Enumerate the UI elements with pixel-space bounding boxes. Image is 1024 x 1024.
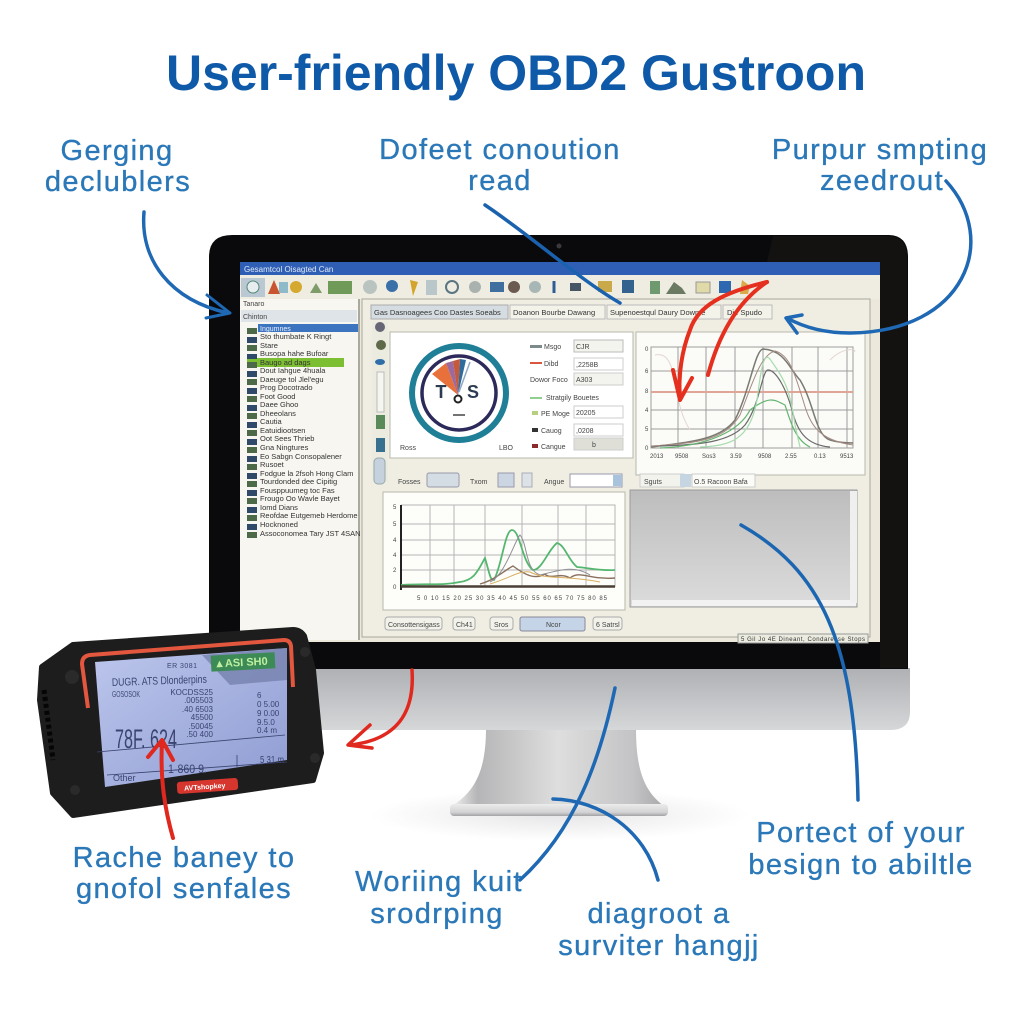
label: top right: Purpur smpting: [772, 134, 988, 166]
control row: [398, 473, 755, 487]
gauge legend: b: [592, 442, 596, 449]
sidebar tree: Reofdae Eutgemeb Herdome: [260, 511, 358, 520]
sidebar tree: Iomd Dians: [260, 503, 298, 512]
line chart top right: 3.59: [730, 454, 742, 460]
sidebar tree: Stare: [260, 341, 278, 350]
device readout: KOCDSS25: [170, 688, 214, 697]
sidebar tree: Tanaro: [243, 301, 265, 308]
red badge: AVTshopkey: [184, 783, 226, 793]
line chart top right: 0: [645, 446, 649, 452]
gauge panel: Ross: [400, 445, 416, 452]
line chart top right: 5: [645, 427, 649, 433]
line chart top right: 2.55: [785, 454, 797, 460]
line chart bottom left: 5 0 10 15 20 25 30 35 40 45 50 55 60 65 70 75 80 85: [417, 596, 608, 602]
monitor stand: [452, 728, 664, 816]
red badge: [177, 778, 238, 794]
label: top left: [45, 135, 191, 198]
line chart bottom left: 5: [393, 505, 397, 511]
control row: Fosses: [398, 479, 421, 486]
gauge legend: Dibd: [544, 361, 559, 368]
label: diagnose: diagroot a: [588, 898, 730, 930]
line chart bottom left: 2: [393, 568, 397, 574]
line chart bottom left: 0: [393, 585, 397, 591]
device readout: GOSOSOK: [112, 690, 140, 699]
sidebar tree: Gna Ningtures: [260, 443, 309, 452]
gauge legend: [530, 340, 623, 451]
sidebar tree: Ingumnes: [260, 326, 291, 333]
device readout: 0.4 m: [257, 726, 277, 735]
gauge legend: Cauog: [541, 428, 562, 435]
device readout: 0 5.00: [257, 700, 280, 709]
sidebar tree: Tourdonded dee Cipitig: [260, 477, 337, 486]
line chart top right: [636, 332, 865, 475]
gauge legend: Dowor Foco: [530, 377, 568, 384]
line chart bottom left: 4: [393, 538, 397, 544]
sidebar tree: Cautia: [260, 417, 283, 426]
arrow: red under monitor: [348, 670, 412, 748]
device readout: 9.5.0: [257, 718, 275, 727]
sidebar tree: Chinton: [243, 314, 267, 321]
sidebar tree: Frougo Oo Wavle Bayet: [260, 494, 341, 503]
control row: O.5 Racoon Bafa: [694, 479, 748, 486]
sidebar tree: Fodgue la 2fsoh Hong Clam: [260, 469, 353, 478]
control row: Angue: [544, 479, 564, 486]
device readout: 45500: [191, 713, 214, 722]
label: lower right: Portect of your: [756, 817, 966, 849]
line chart top right: 8: [645, 389, 649, 395]
annotation arrows: [144, 181, 971, 880]
device readout: .50045: [189, 722, 214, 731]
sidebar tree: Daee Ghoo: [260, 400, 298, 409]
software window: [240, 262, 880, 643]
label: top centre: read: [468, 165, 532, 197]
status bar: 5 Gil Jo 4E Dineant, Condaresse Stops: [741, 637, 865, 643]
line chart bottom left: 4: [393, 553, 397, 559]
label: top right: zeedrout: [820, 165, 944, 197]
sidebar tree: Oot Sees Thrieb: [260, 434, 314, 443]
toolbar: [240, 275, 880, 299]
gauge panel: T: [436, 382, 446, 402]
sidebar tree: Hocknoned: [260, 520, 298, 529]
tabs: Doanon Bourbe Dawang: [513, 308, 595, 317]
sidebar tree: Baugo ad dags: [260, 358, 311, 367]
gauge panel: [390, 332, 633, 458]
buttons row: Consottensigass: [388, 622, 440, 629]
tabs: Gas Dasnoagees Coo Dastes Soeabs: [374, 308, 501, 317]
arrow: red to chart: [673, 282, 767, 400]
control row: Txom: [470, 479, 488, 486]
monitor chin: [210, 668, 910, 730]
device readout: DUGR. ATS Dlonderpins: [112, 674, 207, 689]
sidebar tree: Assoconomea Tary JST 4SAN: [260, 529, 361, 538]
label: top centre: [379, 134, 621, 197]
gauge legend: 20205: [576, 410, 596, 417]
gauge legend: CJR: [576, 344, 590, 351]
sidebar tree: Eo Sabgn Consopalener: [260, 452, 342, 461]
arrow: stand to working label: [520, 688, 615, 880]
red trim: [82, 640, 293, 708]
device readout: .50 400: [186, 730, 214, 739]
label: top left: declublers: [45, 166, 191, 198]
gauge legend: Msgo: [544, 344, 561, 351]
device readout: 78F. 624: [115, 724, 177, 754]
label: top left: Gerging: [61, 135, 173, 167]
sidebar tree: Eatuidiootsen: [260, 426, 305, 435]
tabs: Supenoestqul Daury Dowme: [610, 308, 705, 317]
sidebar tree: Rusoet: [260, 460, 285, 469]
tabs: [371, 305, 772, 319]
line chart top right: 6: [645, 369, 649, 375]
line chart top right: 9513: [840, 454, 854, 460]
label: working: Woriing kuit: [355, 866, 523, 898]
buttons row: Sros: [494, 622, 509, 629]
gauge legend: Stratgily Bouetes: [546, 395, 599, 402]
sidebar tree: Dout Iahgue 4huala: [260, 366, 326, 375]
device readout: ER 3081: [167, 663, 197, 670]
device readout: 5 31 m: [260, 755, 284, 766]
tabs: Die Spudo: [727, 308, 762, 317]
sidebar tree: Daeuge tol Jlel'egu: [260, 375, 324, 384]
gauge legend: ,2258B: [576, 362, 599, 369]
gauge legend: PE Moge: [541, 411, 570, 418]
gauge legend: Cangue: [541, 444, 566, 451]
line chart top right: 2013: [650, 454, 664, 460]
buttons row: [385, 617, 622, 631]
device readout: 6: [257, 691, 262, 700]
sidebar tree: Fousppuumeg toc Fas: [260, 486, 335, 495]
stand shadow: [370, 789, 750, 841]
title bar: [240, 262, 880, 275]
handheld scanner: [40, 630, 321, 815]
arrow: centre label to tabs: [485, 205, 620, 303]
line chart top right: 9508: [675, 454, 689, 460]
line chart bottom left: 5: [393, 522, 397, 528]
label: diagnose: surviter hangjj: [558, 930, 760, 962]
label: top right: [772, 134, 988, 197]
label: working: srodrping: [370, 898, 504, 930]
arrow: base to diagnose label: [553, 799, 658, 880]
line chart top right: 4: [645, 408, 649, 414]
device readout: Other: [113, 773, 136, 783]
vertical tool strip: [372, 322, 388, 484]
status bar: [738, 634, 868, 643]
sidebar tree: [240, 299, 361, 640]
label: lower right: besign to abiltle: [748, 849, 974, 881]
control row: Sguts: [644, 479, 662, 486]
device readout: .40 6503: [182, 705, 214, 714]
status badge: [211, 652, 275, 672]
device screen: [95, 648, 287, 787]
arrow: top left label to sidebar: [144, 212, 230, 318]
monitor bezel: [209, 235, 908, 669]
status badge: ▲ASI SH0: [214, 656, 268, 670]
sidebar tree: Sto thumbate K Ringt: [260, 332, 332, 341]
main panel: [362, 299, 870, 637]
title: User-friendly OBD2 Gustroon: [166, 45, 866, 101]
line chart top right: 0: [645, 347, 649, 353]
device readout: [97, 663, 287, 783]
label: lower right: [748, 817, 974, 881]
label: working: [355, 866, 523, 930]
gauge panel: S: [467, 382, 479, 402]
sidebar tree: Prog Docotrado: [260, 383, 313, 392]
monitor: [209, 235, 910, 841]
line chart bottom left: [383, 492, 625, 610]
sidebar tree: Dheeolans: [260, 409, 296, 418]
gauge legend: A303: [576, 377, 592, 384]
grey output panel: [630, 490, 857, 607]
line chart top right: 9508: [758, 454, 772, 460]
line chart top right: Sos3: [702, 454, 716, 460]
label: diagnose: [558, 898, 760, 962]
device readout: 9 0.00: [257, 709, 280, 718]
arrow: right label to tabs: [786, 181, 971, 333]
label: top centre: Dofeet conoution: [379, 134, 621, 166]
buttons row: 6 Satrsl: [596, 622, 620, 629]
arrow: red to device reading: [148, 740, 173, 838]
label: under device: [73, 842, 295, 905]
gauge panel: LBO: [499, 445, 514, 452]
sidebar tree: Foot Good: [260, 392, 295, 401]
label: under device: Rache baney to: [73, 842, 295, 874]
device readout: 1-860 9.: [168, 762, 207, 776]
title bar: Gesamtcol Oisagted Can: [244, 265, 333, 274]
sidebar tree: Busopa hahe Bufoar: [260, 349, 329, 358]
device readout: .005503: [184, 696, 214, 705]
gauge legend: ,0208: [576, 428, 594, 435]
buttons row: Ch41: [456, 622, 473, 629]
arrow: grey panel to lower right label: [741, 525, 858, 800]
label: under device: gnofol senfales: [76, 873, 292, 905]
line chart top right: 0.13: [814, 454, 826, 460]
buttons row: Ncor: [546, 622, 561, 629]
